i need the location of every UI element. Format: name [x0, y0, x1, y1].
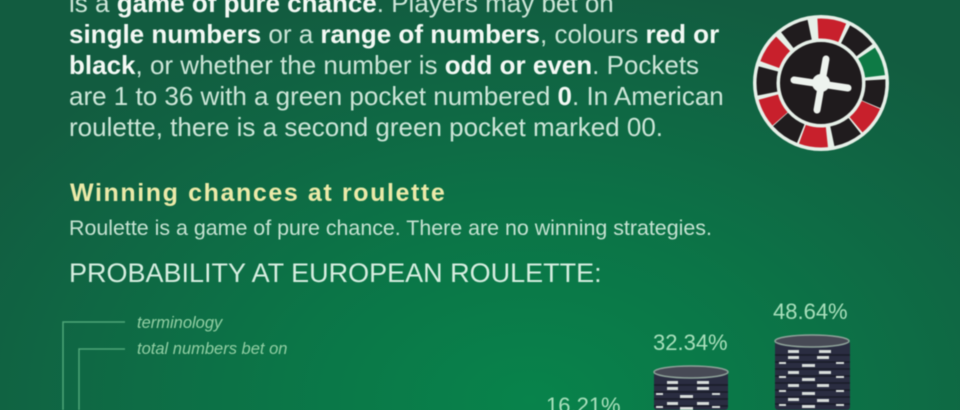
intro text block: black, or whether the number is odd or even. Pockets — [69, 50, 699, 80]
intro text block — [69, 0, 724, 142]
heading: winning chances: Winning chances at roulette — [70, 179, 446, 207]
chip stack: 32.34% — [652, 364, 730, 410]
intro text block: roulette, there is a second green pocket marked 00. — [69, 112, 663, 142]
legend leader lines — [62, 320, 126, 410]
heading: probability: PROBABILITY AT EUROPEAN ROULETTE: — [69, 258, 602, 288]
subtext: Roulette is a game of pure chance. There are no winning strategies. — [69, 216, 712, 240]
intro text block: single numbers or a range of numbers, colours red or — [69, 19, 719, 49]
legend: terminology: terminology — [137, 314, 222, 332]
value: 32.34%: 32.34% — [653, 330, 728, 355]
chip stack: 48.64% — [774, 334, 850, 410]
legend: total numbers bet on: total numbers bet on — [137, 340, 287, 358]
value: 48.64%: 48.64% — [773, 299, 848, 324]
icon: roulette wheel — [752, 14, 890, 152]
intro text block: are 1 to 36 with a green pocket numbered 0. In American — [69, 81, 724, 111]
